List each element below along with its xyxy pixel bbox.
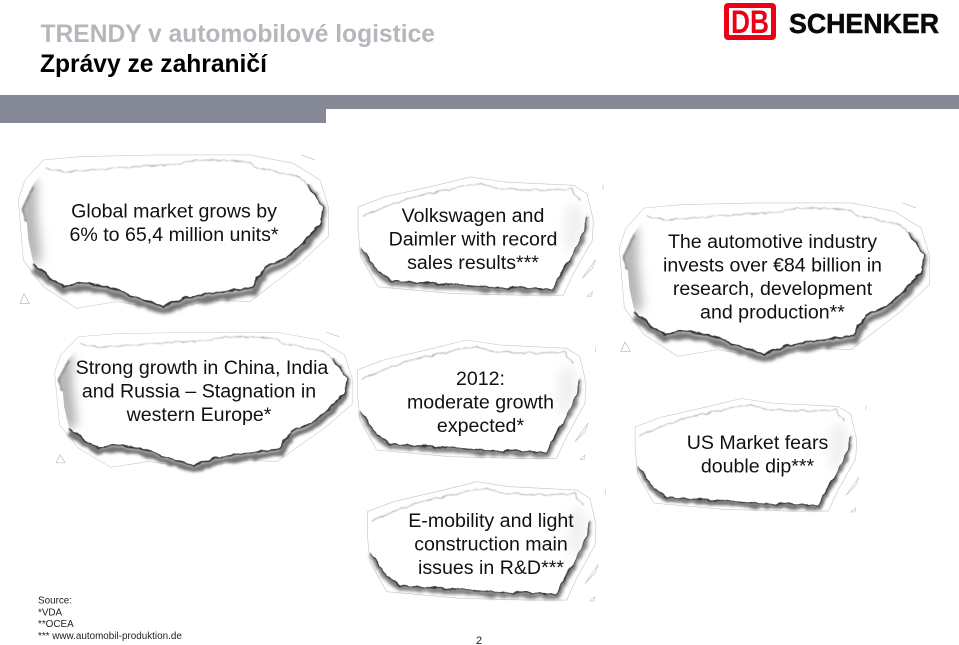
panel: 2012 moderate growth: 2012:	[456, 368, 505, 390]
panel: global market	[18, 155, 328, 311]
source notes: *** www.automobil-produktion.de	[38, 631, 182, 642]
panel: Volkswagen and Daimler: sales results***	[407, 252, 539, 274]
logo: DB Schenker: DB	[731, 4, 769, 40]
panel: E-mobility	[367, 482, 606, 601]
panel: growth in China, India and Russia: Strong growth in China, India	[76, 357, 328, 379]
panel: US market: double dip***	[701, 456, 815, 478]
panel: automotive industry investment: The automotive industry	[668, 231, 877, 253]
panel: Volkswagen and Daimler	[358, 177, 603, 296]
header title: TRENDY: TRENDY v automobilové logistice	[40, 21, 435, 48]
panel: automotive industry investment: invests over €84 billion in	[663, 254, 882, 276]
source notes	[38, 596, 182, 642]
header band	[0, 95, 959, 123]
panel: Volkswagen and Daimler: Volkswagen and	[402, 205, 544, 227]
header subtitle: Zprávy ze zahraničí	[40, 51, 268, 78]
panel: US market: US Market fears	[687, 432, 828, 454]
source notes: *VDA	[38, 608, 63, 618]
panel: global market: 6% to 65,4 million units*	[69, 224, 279, 246]
panel: automotive industry investment	[619, 203, 929, 359]
panel: E-mobility: construction main	[414, 534, 568, 556]
panel: E-mobility: E-mobility and light	[408, 510, 574, 532]
source notes: **OCEA	[38, 619, 74, 630]
panel: growth in China, India and Russia: western Europe*	[126, 404, 272, 426]
panel: E-mobility: issues in R&D***	[418, 557, 564, 579]
panel: growth in China, India and Russia	[55, 332, 352, 470]
panel: growth in China, India and Russia: and Russia – Stagnation in	[82, 380, 316, 402]
panel: automotive industry investment: research, development	[673, 278, 873, 300]
panel: Volkswagen and Daimler: Daimler with record	[389, 228, 557, 250]
panel: US market	[635, 399, 866, 512]
panel: global market: Global market grows by	[71, 200, 277, 222]
panel: 2012 moderate growth: moderate growth	[407, 392, 554, 414]
panel: 2012 moderate growth	[357, 340, 596, 459]
logo: DB Schenker: SCHENKER	[789, 8, 939, 39]
source notes: Source:	[38, 596, 72, 606]
logo: DB Schenker	[724, 3, 939, 40]
panel: automotive industry investment: and production**	[700, 302, 845, 324]
panel: 2012 moderate growth: expected*	[437, 415, 524, 437]
